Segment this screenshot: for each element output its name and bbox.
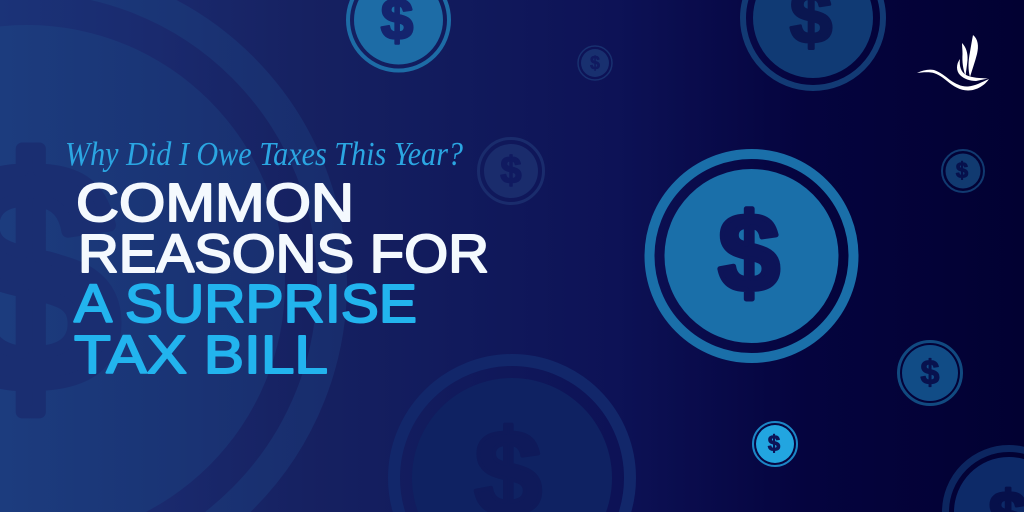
coin: tiny top centre xyxy=(578,46,612,80)
heading: white lines: REASONS FOR xyxy=(78,224,489,284)
coin: main large centre right: $ xyxy=(718,192,780,315)
coin: small bright bottom: $ xyxy=(768,431,780,456)
heading: blue lines: TAX BILL xyxy=(74,325,328,385)
icon: white dove logo xyxy=(917,35,989,90)
heading: blue lines: A SURPRISE xyxy=(74,274,417,334)
coin: tiny top centre: $ xyxy=(590,53,600,73)
coin: faded beside subtitle: $ xyxy=(500,150,522,192)
coin: main large centre right xyxy=(650,154,854,358)
coin: small bright bottom xyxy=(753,422,797,466)
coin: faded bottom centre xyxy=(394,360,630,512)
coin: top left bright xyxy=(348,0,449,70)
coin: medium lower right: $ xyxy=(921,354,940,392)
coin: small right: $ xyxy=(956,158,968,183)
coin: small right xyxy=(942,150,984,192)
coin: cropped bottom right xyxy=(946,448,1024,512)
coin: medium lower right xyxy=(898,342,962,404)
heading: white lines: COMMON xyxy=(76,173,354,233)
heading: blue lines xyxy=(74,274,417,385)
coin: faded beside subtitle xyxy=(478,138,544,204)
coin: top right large xyxy=(743,0,883,88)
heading: white lines xyxy=(76,173,489,284)
subtitle: script line: Why Did I Owe Taxes This Year? xyxy=(65,136,463,173)
